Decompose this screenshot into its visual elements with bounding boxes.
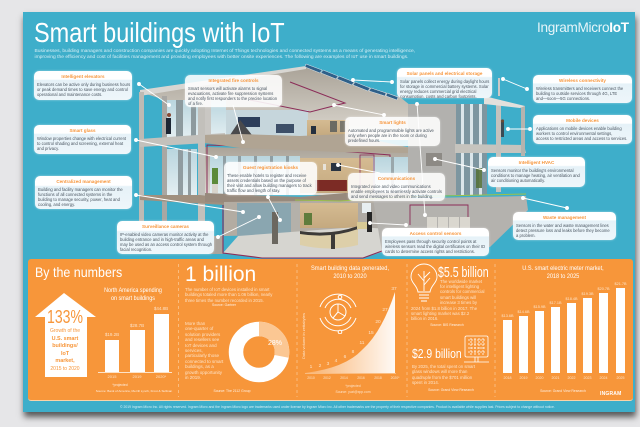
chart: area chart data volume: 6 bbox=[344, 354, 347, 360]
bars: $18.4B bbox=[565, 296, 578, 300]
callout: Waste management: Sensors in the water and waste management lines bbox=[516, 222, 609, 228]
stat: 1 billion bbox=[185, 263, 272, 307]
callout: Centralized management bbox=[35, 176, 132, 209]
ground floor bbox=[223, 200, 410, 258]
bars: $14.6B bbox=[517, 310, 530, 314]
callout: Smart glass: to control shading and screening, external heat bbox=[37, 141, 123, 146]
stat: $2.9 billion bbox=[412, 347, 476, 392]
heading: Smart building data generated: 2010 to 2020 bbox=[333, 273, 367, 280]
title: Smart buildings with IoT bbox=[34, 16, 285, 48]
callout: Access control sensors: Employees pass through security control points at bbox=[385, 238, 476, 244]
bars bbox=[501, 282, 627, 380]
callout: Guest registration kiosks: assets credentials based on the purpose of bbox=[227, 178, 306, 183]
callout: Intelligent HVAC bbox=[488, 157, 585, 187]
bars: $20.7B bbox=[597, 286, 610, 290]
callout: Integrated fire controls bbox=[185, 75, 282, 107]
right tower bbox=[295, 78, 528, 256]
bars: 2023 bbox=[584, 376, 592, 380]
chart: area chart data volume bbox=[301, 286, 400, 394]
bars: 2022 bbox=[568, 376, 576, 380]
callout: Intelligent elevators: operational and maintenance costs. bbox=[37, 92, 102, 97]
callout: Guest registration kiosks bbox=[224, 162, 317, 195]
chart: area chart data volume: 37 bbox=[391, 286, 397, 292]
callout: Wireless connectivity: building to outside services through 4G, LTE bbox=[536, 91, 617, 96]
callout: Smart glass: Window properties change with electrical current bbox=[37, 136, 126, 140]
callout: Solar panels and electrical storage: for storage in commercial battery systems. Solar bbox=[400, 84, 489, 89]
chart: area chart data volume: 3 bbox=[327, 361, 330, 367]
stat: solution providers text: buildings, as a bbox=[185, 364, 214, 369]
bars: $17.1B bbox=[549, 300, 562, 304]
chart: North America spending: North America spending bbox=[104, 286, 162, 294]
callout: Surveillance cameras: IP-enabled video cameras monitor activity at the bbox=[120, 232, 208, 236]
chart: area chart data volume: 20 bbox=[375, 319, 381, 325]
stat: 1 billion: The number of IoT devices installed in smart bbox=[185, 287, 269, 292]
stat: 1 billion: Source: Gartner bbox=[212, 303, 236, 307]
chart: North America spending: Source: Bank of America, Merrill Lynch, Frost & Sullivan bbox=[96, 389, 172, 393]
stat: 1 billion: buildings totaled more than 1.06 billion, nearly bbox=[185, 292, 272, 297]
intro text: Businesses, building managers and construction companies are quickly adopting Internet of Things technologies and connected systems as a means of generating intelligence, bbox=[34, 49, 415, 54]
chart: 28% donut: 28% bbox=[268, 340, 282, 347]
chart: North America spending: $44.8B bbox=[154, 306, 168, 311]
callout: Communications: Integrated voice and video communications bbox=[351, 184, 431, 188]
stat: solution providers text: IoT devices and bbox=[185, 343, 217, 348]
callout: Communications bbox=[348, 173, 445, 201]
panel: by the numbers orange band bbox=[28, 259, 633, 401]
chart: North America spending: 2019 bbox=[133, 374, 141, 379]
chart: U.S. smart electric meter market: 2018 to 2025 bbox=[547, 273, 579, 280]
stat: $5.5 billion: smart lighting market was $2.2 bbox=[411, 311, 469, 316]
chart: U.S. smart electric meter market: U.S. smart electric meter market, bbox=[522, 265, 604, 272]
callout: Wireless connectivity: Wireless transmitters and receivers connect the bbox=[536, 86, 623, 90]
chart: area chart data volume: 8 bbox=[352, 349, 355, 355]
callout: Smart glass: Smart glass bbox=[69, 128, 96, 133]
chart: area chart data volume: 2010 bbox=[307, 376, 315, 380]
bars: $21.7B bbox=[614, 282, 627, 286]
callout: Mobile devices bbox=[533, 115, 632, 144]
footer legal text: © 2019 Ingram Micro Inc. All rights reserved. Ingram Micro and the Ingram Micro logo are trademarks used under license by Ingram Micro Inc. All other trademarks are the property of their respective companies. Product is available while supplies last. Prices subject to change without notice. bbox=[120, 404, 555, 408]
callout: Intelligent HVAC: conditions to manage heating, air ventilation and bbox=[491, 173, 580, 178]
callout: Wireless connectivity: and—soon—5G connections. bbox=[536, 96, 590, 101]
stat: $5.5 billion bbox=[411, 265, 489, 327]
chart: North America spending: on smart buildings bbox=[111, 294, 155, 302]
stat: 133% growth arrow bbox=[35, 293, 96, 377]
callout: Smart lights: Smart lights bbox=[379, 120, 406, 125]
bars: 2024 bbox=[600, 376, 608, 380]
callout: Intelligent elevators: Intelligent elevators bbox=[61, 74, 105, 79]
callout: Access control sensors: wireless sensors read the digital certificates on their ID bbox=[385, 244, 485, 249]
stat: $5.5 billion: $5.5 billion bbox=[438, 265, 489, 281]
callout: Integrated fire controls: evacuations, activate fire suppression systems bbox=[188, 91, 273, 96]
callout: Guest registration kiosks: traffic flow and length of stay. bbox=[227, 188, 280, 193]
heading: By the numbers: By the numbers bbox=[35, 264, 122, 280]
callout: Access control sensors bbox=[382, 228, 489, 256]
chart: North America spending: 2015 bbox=[108, 374, 116, 379]
callout: Access control sensors: Access control sensors bbox=[410, 231, 461, 236]
solar panels on roof bbox=[305, 64, 398, 100]
chart: area chart data volume: 11 bbox=[360, 340, 365, 346]
chart: area chart data volume: 1 bbox=[310, 364, 313, 370]
left columns and floor slabs bbox=[139, 92, 225, 254]
chart: North America spending: 2020* bbox=[156, 374, 166, 379]
callout: Waste management bbox=[513, 212, 616, 240]
callout: Communications: enable employees to seamlessly activate controls bbox=[351, 189, 442, 194]
callout: Mobile devices: Mobile devices bbox=[566, 118, 599, 123]
callout: Waste management: a problem. bbox=[516, 233, 536, 238]
stat: solution providers text: one-quarter of bbox=[185, 326, 213, 331]
bars: 2019 bbox=[520, 376, 528, 380]
stat: 133% growth arrow: 133% bbox=[47, 307, 83, 327]
callout: Solar panels and electrical storage: Solar panels collect energy during daylight hours bbox=[400, 78, 489, 84]
callout: Wireless connectivity: Wireless connectivity bbox=[559, 78, 606, 83]
stat: solution providers text: in 2019. bbox=[185, 375, 201, 380]
chart: U.S. smart electric meter market: Source: Grand View Research bbox=[540, 388, 586, 392]
callout connector lines bbox=[134, 78, 568, 238]
bars: $15.9B bbox=[533, 304, 546, 308]
callout: Solar panels and electrical storage bbox=[397, 68, 492, 98]
bars: 2021 bbox=[552, 376, 560, 380]
callout: Guest registration kiosks: These enable hotels to register and receive bbox=[227, 172, 306, 178]
chart: North America spending bbox=[96, 286, 172, 393]
callout: Surveillance cameras: building entrance and in high-traffic areas and bbox=[120, 237, 204, 242]
icon: smart glass panel bbox=[464, 336, 489, 362]
logo: Ingram Micro IoT: IngramMicroIoT bbox=[537, 20, 629, 34]
stat: $2.9 billion: glass windows will more than bbox=[412, 369, 467, 374]
upper floor interior bbox=[140, 66, 411, 140]
callout: Centralized management: Building and facility managers can monitor the bbox=[38, 186, 123, 192]
stat: solution providers text: connected to smart bbox=[185, 359, 223, 364]
callout: Guest registration kiosks: their visit and allow building managers to track bbox=[227, 183, 312, 188]
stat: $5.5 billion: Source: BIS Research bbox=[430, 323, 464, 327]
callout: Mobile devices: access to restricted areas and access to services. bbox=[536, 136, 627, 141]
bars: 2025 bbox=[616, 376, 624, 380]
icon: light bulb bbox=[410, 264, 438, 302]
chart: area chart data volume: 2018 bbox=[374, 376, 382, 380]
callout: Smart lights: only when people are in the room or during bbox=[348, 133, 427, 138]
callout: Access control sensors: cards to determine access rights and restrictions. bbox=[385, 249, 475, 254]
callout: Surveillance cameras bbox=[117, 221, 214, 254]
chart: area chart data volume: 2016 bbox=[357, 376, 365, 380]
stat: 133% growth arrow: 2015 to 2020 bbox=[50, 366, 80, 372]
stat: $5.5 billion: increase 3 times by bbox=[440, 300, 477, 305]
logo: Ingram: INGRAM bbox=[600, 391, 621, 397]
icon: data target bbox=[320, 294, 356, 334]
callout: Mobile devices: Applications on mobile devices enable building bbox=[536, 126, 622, 130]
callout: Communications: Communications bbox=[378, 176, 415, 181]
slab between upper and middle floor bbox=[205, 134, 412, 153]
chart: area chart data volume: 2014 bbox=[340, 376, 348, 380]
stat: 133% growth arrow: buildings/ bbox=[52, 343, 78, 349]
callout: Smart glass bbox=[34, 125, 131, 154]
stat: $2.9 billion: spent in 2014. bbox=[412, 380, 439, 385]
callout: Wireless connectivity bbox=[533, 75, 632, 103]
chart: area chart data volume: 2 bbox=[319, 363, 322, 369]
stat: $5.5 billion: The worldwide market bbox=[440, 278, 482, 284]
intro text bbox=[34, 48, 415, 60]
callout: Smart lights: Automated and programmable lights are active bbox=[348, 128, 434, 132]
chart: area chart data volume: 27 bbox=[382, 307, 388, 313]
stat: solution providers text: particularly those bbox=[185, 353, 219, 358]
stat: 133% growth arrow: IoT bbox=[61, 351, 69, 357]
stat: 133% growth arrow: market, bbox=[55, 358, 75, 364]
callout: Intelligent HVAC: Intelligent HVAC bbox=[519, 160, 554, 165]
chart: North America spending: $28.7B bbox=[130, 323, 144, 328]
stat: $2.9 billion: Source: Grand View Research bbox=[428, 388, 474, 392]
bars: $19.3B bbox=[581, 292, 594, 296]
chart: area chart data volume: Data volume in zettabytes bbox=[301, 313, 306, 359]
chart: North America spending: $19.2B bbox=[105, 332, 119, 337]
callout: Surveillance cameras: Surveillance cameras bbox=[142, 224, 189, 229]
bars: 2020 bbox=[536, 376, 544, 380]
stat: solution providers text: More than bbox=[185, 321, 205, 326]
stat: $2.9 billion: By 2025, the total spent on smart bbox=[412, 364, 475, 369]
stat: $5.5 billion: controls for commercial bbox=[440, 289, 484, 294]
callout: Integrated fire controls: of a fire. bbox=[188, 101, 203, 106]
chart: 28% donut bbox=[228, 322, 290, 382]
stat: solution providers text bbox=[185, 321, 224, 380]
stat: $5.5 billion: 2024 from $1.8 billion in 2017. The bbox=[411, 306, 477, 310]
chart: area chart data volume: 15 bbox=[368, 330, 374, 336]
stat: $2.9 billion: $2.9 billion bbox=[412, 347, 462, 361]
callout: Integrated fire controls: Integrated fire controls bbox=[208, 78, 259, 83]
stat: $5.5 billion: for intelligent lighting bbox=[440, 284, 479, 289]
callout: Solar panels and electrical storage: Solar panels and electrical storage bbox=[407, 71, 482, 76]
chart: North America spending: *projected bbox=[112, 383, 128, 387]
intro text: improving the efficiency and cost of facilities management and providing employees with better onsite experiences. The following are examples of IoT use in smart buildings. bbox=[34, 55, 408, 60]
slab between middle and ground floor bbox=[205, 193, 412, 205]
stat: solution providers text: growth opportunity bbox=[185, 370, 222, 375]
chart: area chart data volume: 4 bbox=[335, 358, 338, 364]
source: donut: Source: The 2112 Group bbox=[213, 389, 251, 393]
heading: Smart building data generated bbox=[311, 265, 389, 280]
chart: area chart data volume: *projected bbox=[345, 384, 361, 388]
middle floor bbox=[205, 145, 410, 195]
callout: Communications: and send messages to others in the building. bbox=[351, 194, 433, 199]
callout: Centralized management: cooling, and energy. bbox=[38, 202, 75, 207]
chart: area chart data volume: 2020* bbox=[391, 376, 400, 380]
chart: area chart data volume: Source: yuzt@xpp.com bbox=[335, 390, 371, 394]
callout: Guest registration kiosks: Guest registration kiosks bbox=[243, 165, 298, 170]
callout: Intelligent HVAC: Sensors monitor the building's environmental bbox=[491, 168, 574, 172]
people and plants bbox=[166, 113, 218, 193]
stat: solution providers text: solution providers bbox=[185, 332, 220, 337]
stat: 1 billion: 1 billion bbox=[185, 263, 256, 286]
stat: 133% growth arrow: U.S. smart bbox=[52, 336, 78, 342]
callout: Intelligent elevators: or peak demand times to save energy and control bbox=[37, 87, 128, 92]
callout: Smart glass: and privacy. bbox=[37, 146, 59, 151]
bars: $13.6B bbox=[501, 314, 514, 318]
heading: Smart building data generated: Smart building data generated, bbox=[311, 265, 389, 272]
callout: Integrated fire controls: and notify first responders to the precise location bbox=[188, 96, 277, 101]
callout: Centralized management: Centralized management bbox=[56, 179, 111, 184]
stat: solution providers text: services, bbox=[185, 348, 203, 353]
callout: Intelligent HVAC: air conditioning automatically. bbox=[491, 178, 545, 183]
stat: 133% growth arrow: Growth of the bbox=[50, 328, 80, 334]
stat: $5.5 billion: smart buildings will bbox=[440, 295, 476, 300]
callout: Mobile devices: workers to control environmental settings, bbox=[536, 131, 612, 136]
callout: Smart lights: predefined hours. bbox=[348, 138, 380, 143]
callout: Intelligent elevators bbox=[34, 71, 132, 100]
callout: Surveillance cameras: may be used as an access control system through bbox=[120, 242, 212, 247]
stat: 1 billion: three times the number recorded in 2015. bbox=[185, 298, 264, 303]
callout: Centralized management: functions of all connected systems in the bbox=[38, 192, 112, 197]
callout: Waste management: Waste management bbox=[543, 215, 586, 220]
callout: Waste management: detect pressure loss and leaks before they become bbox=[516, 228, 610, 233]
chart: U.S. smart electric meter market bbox=[501, 265, 627, 392]
callout: Solar panels and electrical storage: energy reduces commercial grid electrical bbox=[400, 89, 476, 94]
bars: 2018 bbox=[504, 376, 512, 380]
callout: Centralized management: building to manage security, power, heat and bbox=[38, 197, 120, 202]
chart: area chart data volume: 2012 bbox=[323, 376, 331, 380]
stat: solution providers text: and resellers see bbox=[185, 337, 219, 342]
callout: Intelligent elevators: Elevators can be active only during business hours bbox=[37, 82, 130, 86]
stat: $5.5 billion: billion in 2016. bbox=[411, 316, 438, 321]
callout: Surveillance cameras: facial recognition. bbox=[120, 247, 152, 252]
callout: Integrated fire controls: Smart sensors will activate alarms to signal bbox=[188, 86, 267, 90]
stat: $2.9 billion: quadruple from the $701 million bbox=[412, 375, 472, 380]
callout: Smart lights bbox=[345, 117, 440, 146]
